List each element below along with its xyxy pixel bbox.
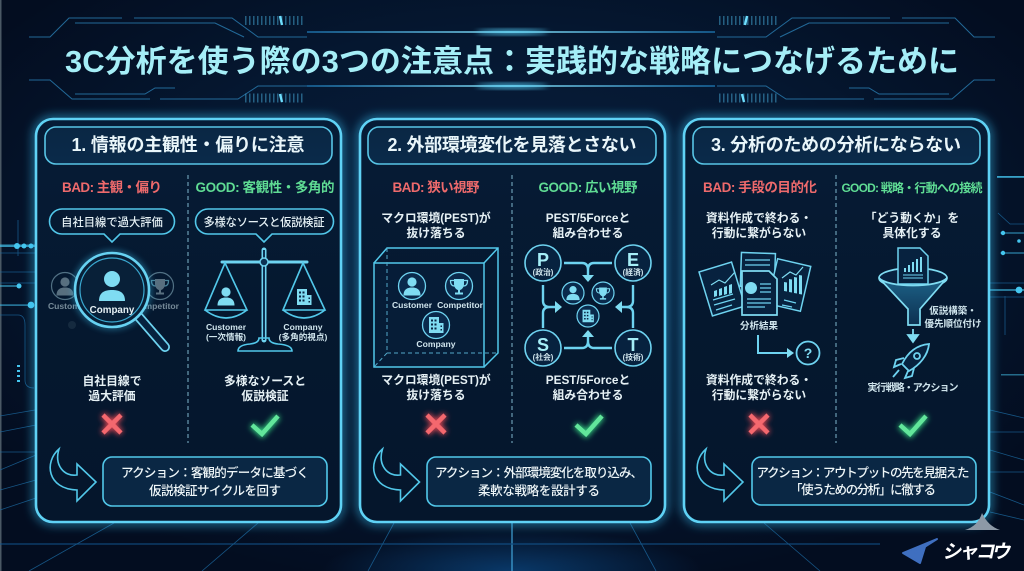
good text: PEST/5Forceと [546,373,630,387]
icon: magnifier over company: Company [90,305,135,316]
icon: magnifier over company: Customer [48,301,89,311]
good description: 組み合わせる [553,226,623,240]
panel 1 heading: 1. 情報の主観性・偏りに注意 [72,135,304,155]
icon: red cross [750,415,768,433]
icon: red cross [427,415,445,433]
good description [865,211,959,240]
label: execution strategy: 実行戦略・アクション [868,381,958,394]
bad label: BAD: 手段の目的化 [703,179,818,195]
bubble: diverse sources [196,209,334,242]
panel 2 heading: 2. 外部環境変化を見落とさない [388,135,636,155]
bubble: overestimate [50,209,174,242]
bad text [82,374,142,403]
bad description: 行動に繋がらない [712,226,806,240]
bad text: 行動に繋がらない [712,388,806,402]
bubble: diverse sources: 多様なソースと仮説検証 [204,215,324,229]
bad text: 過大評価 [88,389,136,403]
label: hypothesis and priorities [924,305,982,330]
label: analysis results: 分析結果 [740,320,778,332]
icon: balance scale [205,250,327,351]
good text: 組み合わせる [553,388,623,402]
good label: GOOD: 戦略・行動への接続 [842,180,982,195]
icon: closed box around 3C [374,248,498,367]
bad text: 資料作成で終わる・ [706,373,812,387]
icon: green check [576,416,602,434]
good text: 多様なソースと [224,374,306,388]
diagram: PEST forces acting on 3C: P [537,250,549,270]
action box: 柔軟な戦略を設計する [478,483,600,498]
bad text [381,373,491,402]
good description [546,211,630,240]
bad description: 抜け落ちる [406,226,466,240]
diagram: PEST forces acting on 3C: (社会) [533,352,554,362]
panel 2 heading [368,127,656,164]
bad label: BAD: 主観・偏り [62,179,162,195]
icon: balance scale: (多角的視点) [279,331,327,342]
icon: curved action arrow [374,449,420,501]
action box: 「使うための分析」に徹する [790,482,936,497]
panel 3 heading [693,127,980,164]
icon: funnel with document [879,248,947,325]
action box: アクション：客観的データに基づく [121,465,309,480]
diagram: PEST forces acting on 3C: T [628,335,638,355]
good text [546,373,630,402]
logo: Shakou [903,513,1014,563]
diagram: PEST forces acting on 3C [525,245,651,366]
good description: 「どう動くか」を [865,211,959,225]
diagram: PEST forces acting on 3C: E [627,250,639,270]
label: hypothesis and priorities: 仮説構築・ [929,305,977,317]
icon: arrow to question mark: ? [804,345,812,361]
panel 1: subjectivity and bias [36,119,341,522]
action box [103,457,327,506]
icon: red cross [103,415,121,433]
bad description: マクロ環境(PEST)が [381,211,491,225]
bad text: マクロ環境(PEST)が [381,373,491,387]
icon: magnifier over company: Competitor [133,301,180,311]
panel 1 heading [45,127,332,164]
panel 3: analysis for its own sake [684,119,989,522]
good description: 具体化する [882,226,942,240]
bad text [706,373,812,402]
bad description [706,211,812,240]
bad text: 自社目線で [82,374,142,388]
icon: closed box around 3C: Competitor [437,300,484,310]
icon: closed box around 3C: Company [416,339,456,349]
label: hypothesis and priorities: 優先順位付け [924,318,982,330]
title: 3C分析を使う際の3つの注意点：実践的な戦略につなげるために [65,44,959,79]
action box: アクション：外部環境変化を取り込み、 [435,465,643,480]
logo: Shakou: シャコウ [941,541,1014,563]
icon: balance scale: (一次情報) [206,331,246,342]
action box: アクション：アウトプットの先を見据えた [756,465,970,480]
icon: green check [900,416,926,434]
good description: PEST/5Forceと [546,211,630,225]
icon: arrow to question mark [758,335,820,364]
icon: down arrow [908,329,918,342]
bad description [381,211,491,240]
diagram: PEST forces acting on 3C: (政治) [533,267,554,277]
diagram: PEST forces acting on 3C: (経済) [623,267,644,277]
icon: curved action arrow [697,449,743,501]
icon: curved action arrow [50,449,96,501]
good label: GOOD: 客観性・多角的 [196,179,334,195]
title frame circuit lines [29,16,995,102]
icon: magnifier over company [48,253,180,347]
action box [752,457,976,505]
diagram: PEST forces acting on 3C: S [537,335,549,355]
icon: rocket [893,344,929,378]
action box [427,457,651,506]
icon: balance scale: Customer [206,322,247,332]
icon: green check [252,416,278,434]
good text [224,374,306,403]
icon: pile of analysis documents [699,252,811,316]
bad label: BAD: 狭い視野 [392,179,480,195]
bad text: 抜け落ちる [406,388,466,402]
icon: closed box around 3C: Customer [392,300,433,310]
panel 3 heading: 3. 分析のための分析にならない [711,135,961,155]
bubble: overestimate: 自社目線で過大評価 [61,215,163,229]
action box: 仮説検証サイクルを回す [149,483,281,498]
bad description: 資料作成で終わる・ [706,211,812,225]
diagram: PEST forces acting on 3C: (技術) [623,352,644,362]
good text: 仮説検証 [241,389,289,403]
good label: GOOD: 広い視野 [538,179,638,195]
panel 2: external environment [360,119,665,522]
icon: balance scale: Company [283,322,323,332]
